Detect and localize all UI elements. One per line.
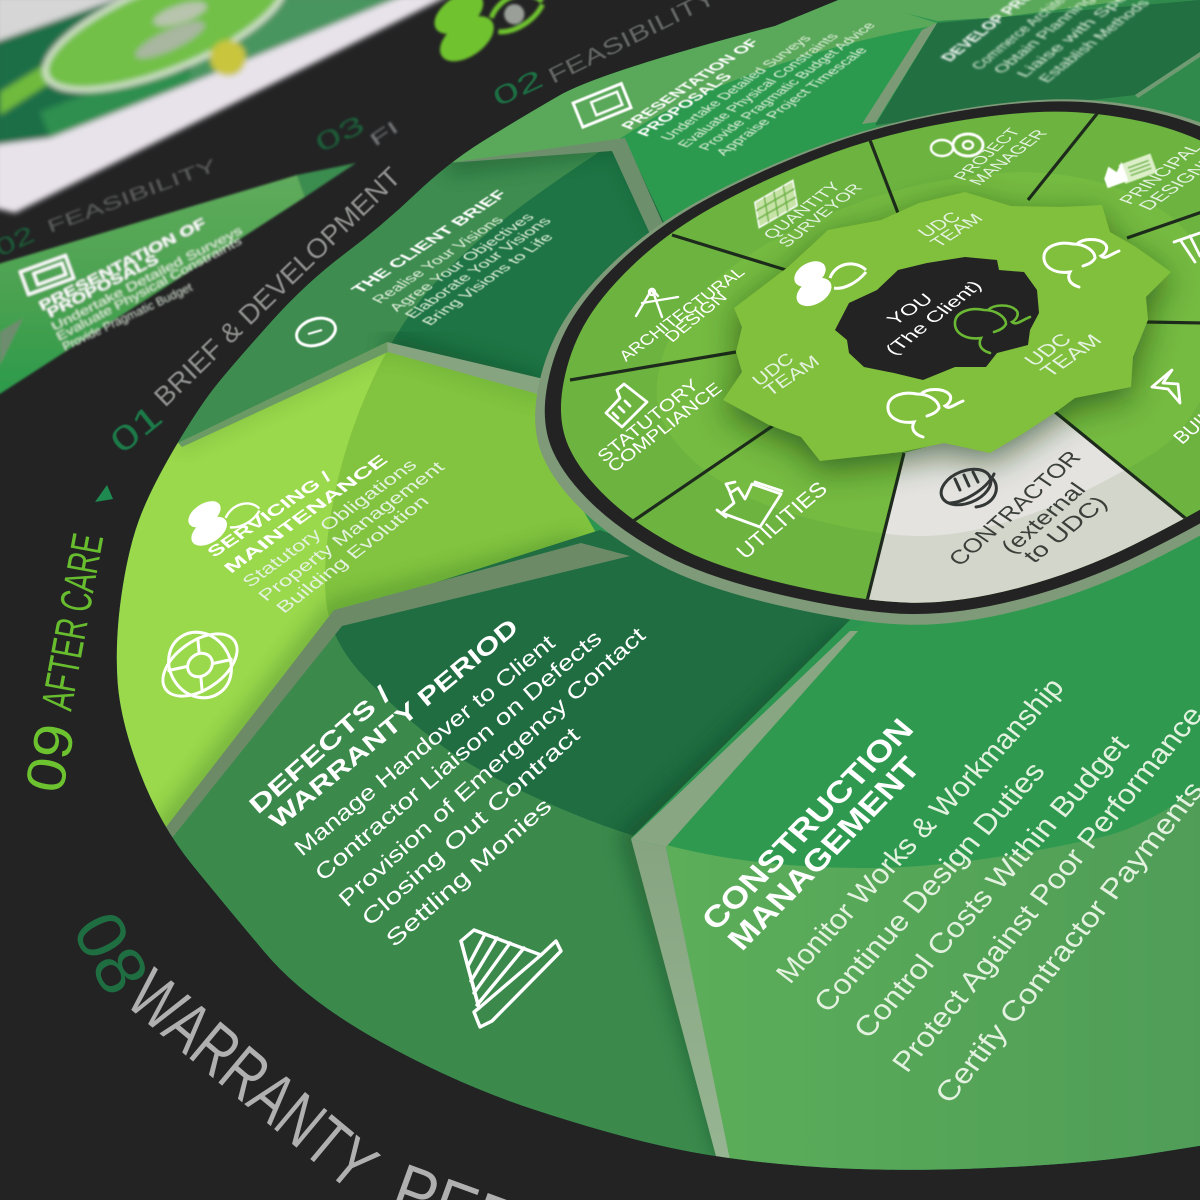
labels on the segments: COMPLIANCE (604, 379, 726, 476)
text: the client brief (348, 188, 557, 327)
icon: lifebuoy (146, 613, 254, 717)
icon: team people, bottom (888, 390, 963, 437)
partial feasibility panel on the neighbouring sheet (0, 109, 402, 397)
heading: 02 feasibility fragment: FEASIBILITY (44, 155, 219, 237)
text: presentation of proposals: Provide Pragmatic Budget Advice (695, 21, 879, 152)
text: servicing and maintenance: Building Evolution (271, 492, 433, 617)
icon: document stack, quantity surveyor (755, 180, 797, 228)
text: develop proposals (937, 0, 1200, 84)
text: presentation of proposals: PRESENTATION OF (618, 37, 764, 132)
heading: 02 feasibility fragment (0, 155, 219, 262)
heading: 08 warranty period: 08 (58, 899, 164, 1007)
panel: after care (116, 345, 595, 828)
icon: UDC logo, servicing (183, 493, 261, 552)
heading: 02 feasibility: 02 (488, 63, 548, 112)
icon: traffic cone (461, 930, 561, 1027)
heading: 09 after care: 09 (13, 719, 87, 797)
icon: UDC logo, hub (790, 256, 866, 312)
text: UDC team labels: TEAM (760, 352, 823, 400)
panel: brief and development (178, 151, 664, 443)
text: you, the client: YOU (882, 290, 937, 329)
text: presentation of proposals: Evaluate Physical Constraints (54, 234, 244, 344)
labels on the segments: to UDC) (1018, 492, 1113, 567)
heading: 09 after care: AFTER CARE (33, 530, 113, 714)
icon: lightning bolt (1152, 370, 1180, 403)
icon: UDC logo in green, top (425, 0, 548, 72)
segments (560, 112, 1200, 603)
text: presentation of proposals: Appraise Project Timescale (712, 46, 871, 157)
labels on the segments: QUANTITY (760, 180, 846, 242)
panel: construction management (666, 786, 1200, 1170)
text: construction management: Monitor Works & Workmanship (770, 672, 1071, 989)
text: construction management: Protect Against Poor Performance (886, 701, 1200, 1078)
icon: pylon (1174, 233, 1200, 262)
text: presentation of proposals: PROPOSALS (634, 71, 737, 139)
text: defects and warranty period (244, 614, 650, 952)
text: presentation of proposals: Provide Pragmatic Budget (60, 280, 195, 354)
icon: team people, right (1044, 240, 1119, 287)
icon: document (20, 256, 74, 294)
text: defects and warranty period: DEFECTS / (244, 681, 396, 820)
panel group: inner team wheel (535, 99, 1200, 625)
labels on the segments (593, 126, 1200, 570)
heading: 09 after care (13, 530, 113, 797)
heading: 08 warranty period (58, 899, 635, 1200)
panel: defects and warranty (166, 530, 850, 1158)
icon: pipes, utilities (717, 482, 782, 527)
heading: 03 fragment (310, 109, 402, 158)
text: you, the client: (The Client) (880, 277, 986, 358)
text: presentation of proposals: PRESENTATION OF (36, 214, 209, 314)
blurred second poster sheet, top left (0, 0, 450, 213)
text: UDC team labels: TEAM (1036, 331, 1107, 381)
text: defects and warranty period: WARRANTY PERIOD (265, 614, 524, 835)
text: presentation of proposals: Undertake Detailed Surveys (49, 223, 244, 334)
labels on the segments: ARCHITECTURAL (615, 264, 749, 365)
heading: 01 brief and development: BRIEF & DEVELOPMENT (148, 161, 407, 412)
text: servicing and maintenance: SERVICING / (203, 468, 336, 561)
hub centre: you, the client (835, 257, 1039, 380)
text: servicing and maintenance: MAINTENANCE (220, 452, 392, 577)
folds between panels (156, 23, 937, 1165)
text: the client brief: Bring Visions to Life (417, 231, 557, 327)
labels on the segments: UTILITIES (732, 478, 832, 563)
segment separators (570, 110, 1200, 605)
text: defects and warranty period: Settling Monies (381, 793, 556, 952)
text: UDC team labels (748, 209, 1107, 400)
text: UDC team labels: UDC (913, 209, 965, 240)
text: the client brief: Realise Your Visions (368, 214, 507, 305)
black ring (545, 101, 1200, 614)
text: the client brief: Agree Your Objectives (384, 211, 538, 313)
segment: contractor (grey) (866, 413, 1186, 603)
text: presentation of proposals (36, 214, 244, 354)
labels on the segments: MANAGER (965, 128, 1052, 188)
heading: 01 brief and development: 01 (103, 397, 170, 461)
text: defects and warranty period: Closing Out Contract (357, 722, 584, 931)
text: defects and warranty period: Contractor Liaison on Defects (310, 625, 606, 886)
text: servicing and maintenance: Statutory Obligations (238, 456, 421, 591)
labels on the segments: PRINCIPAL (1114, 141, 1200, 207)
text: construction management: Continue Design Duties (808, 757, 1052, 1018)
heading: 02 feasibility: FEASIBILITY (544, 0, 720, 88)
text: the client brief: Elaborate Your Visions (400, 215, 555, 320)
icon: gears, project manager (931, 134, 983, 156)
text: construction management (694, 672, 1200, 1109)
hub: UDC team star (723, 192, 1171, 461)
text: defects and warranty period: Provision of Emergency Contact (334, 622, 650, 912)
text: presentation of proposals: Undertake Detailed Surveys (657, 33, 815, 142)
panel: develop proposals (865, 0, 1200, 126)
panel: feasibility (452, 0, 937, 162)
labels on the segments: PROJECT (950, 126, 1025, 182)
labels on the segments: SURVEYOR (775, 182, 867, 250)
text: UDC team labels: TEAM (926, 211, 988, 250)
text: servicing and maintenance (203, 452, 449, 617)
text: presentation of proposals: Evaluate Physical Constraints (674, 31, 842, 149)
text: UDC team labels: UDC (1020, 330, 1077, 370)
labels on the segments: CONTRACTOR (943, 447, 1086, 570)
icon: client people (955, 306, 1030, 353)
text: construction management: Control Costs Within Budget (848, 730, 1136, 1044)
heading: 03 fragment: 03 (310, 109, 369, 158)
labels on the segments: (external (995, 478, 1091, 558)
text: you, the client (880, 277, 986, 358)
hub drop shadow (723, 202, 1171, 471)
labels on the segments: STATUTORY (593, 375, 703, 466)
icon: drafting compass, architectural design (636, 289, 678, 317)
panel: feasibility fragment (0, 175, 305, 397)
icon: hard hat, contractor (936, 462, 996, 512)
heading: 03 fragment: FI (366, 117, 402, 150)
text: the client brief: THE CLIENT BRIEF (348, 188, 512, 296)
icon: light bulb (293, 313, 339, 351)
text: construction management: MANAGEMENT (720, 751, 927, 956)
text: defects and warranty period: Manage Handover to Client (289, 630, 560, 861)
text: construction management: CONSTRUCTION (694, 712, 921, 936)
text: presentation of proposals (618, 21, 879, 157)
text: UDC team labels: UDC (748, 349, 798, 390)
icon: plans, principal designer (1101, 152, 1157, 190)
ring edge band (535, 99, 1200, 625)
heading: 01 brief and development (103, 161, 407, 461)
text: servicing and maintenance: Property Management (253, 458, 449, 605)
icon: ruler block, statutory compliance (606, 384, 647, 427)
labels on the segments: DESIGN (661, 289, 731, 346)
heading: 02 feasibility (488, 0, 720, 112)
arrow: stage marker (95, 485, 113, 502)
icon: document, feasibility (573, 84, 631, 127)
text: construction management: Certify Contractor Payments (929, 776, 1200, 1109)
text: presentation of proposals: PROPOSALS (44, 251, 161, 321)
